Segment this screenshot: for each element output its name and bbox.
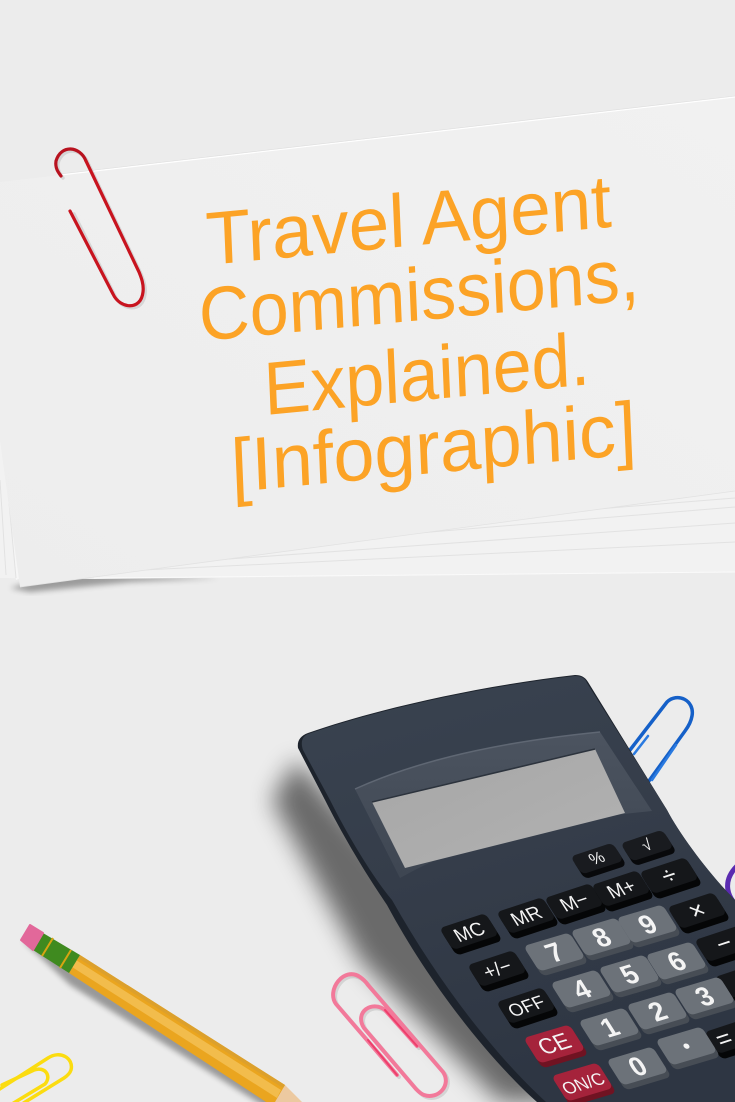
- number keys: 7: [539, 937, 570, 968]
- title line 1: Travel Agent: [204, 159, 613, 281]
- number keys: 1: [594, 1012, 625, 1043]
- display bezel: [355, 732, 652, 878]
- calculator shadow: [272, 760, 560, 1102]
- function keys: MR: [507, 902, 547, 931]
- red keys: CE: [532, 1028, 576, 1060]
- pencil body: [69, 955, 285, 1102]
- paper stack: [0, 96, 735, 592]
- top sheet: [0, 97, 735, 587]
- function keys: +/−: [479, 956, 517, 983]
- title line 4: [Infographic]: [229, 386, 638, 508]
- icon: blue paperclip: [630, 698, 692, 785]
- number keys: 0: [622, 1051, 653, 1082]
- function keys: MC: [450, 918, 490, 947]
- function keys: ÷: [655, 861, 683, 890]
- function keys: OFF: [504, 991, 549, 1021]
- title line 3: Explained.: [262, 316, 591, 431]
- number keys: •: [677, 1036, 696, 1057]
- number keys: 9: [632, 909, 663, 940]
- function keys: M+: [603, 876, 641, 903]
- number keys: 3: [689, 981, 720, 1012]
- number keys: 2: [642, 996, 673, 1027]
- title: [197, 159, 641, 508]
- pencil tip: [270, 1085, 302, 1102]
- function keys: √: [638, 836, 656, 855]
- red keys: [523, 1024, 617, 1102]
- title line 2: Commissions,: [197, 231, 641, 357]
- icon: yellow paperclip: [0, 1055, 71, 1102]
- red keys: ON/C: [558, 1069, 609, 1098]
- function keys: [439, 830, 735, 1060]
- icon: pencil: [21, 925, 302, 1102]
- pencil eraser: [21, 925, 43, 950]
- calculator: [298, 675, 735, 1102]
- calculator body: [298, 675, 735, 1102]
- function keys: ×: [683, 896, 712, 925]
- display screen: [372, 749, 625, 868]
- function keys: %: [585, 848, 609, 869]
- icon: purple paperclip: [728, 866, 735, 906]
- pencil ferrule: [33, 933, 80, 973]
- icon: pink paperclip: [333, 974, 448, 1098]
- number keys: 8: [586, 922, 617, 953]
- icon: red paperclip: [56, 149, 145, 308]
- number keys: [523, 904, 735, 1091]
- number keys: 4: [566, 973, 598, 1005]
- number keys: 6: [661, 946, 692, 977]
- number keys: 5: [614, 959, 645, 990]
- function keys: M−: [556, 889, 594, 916]
